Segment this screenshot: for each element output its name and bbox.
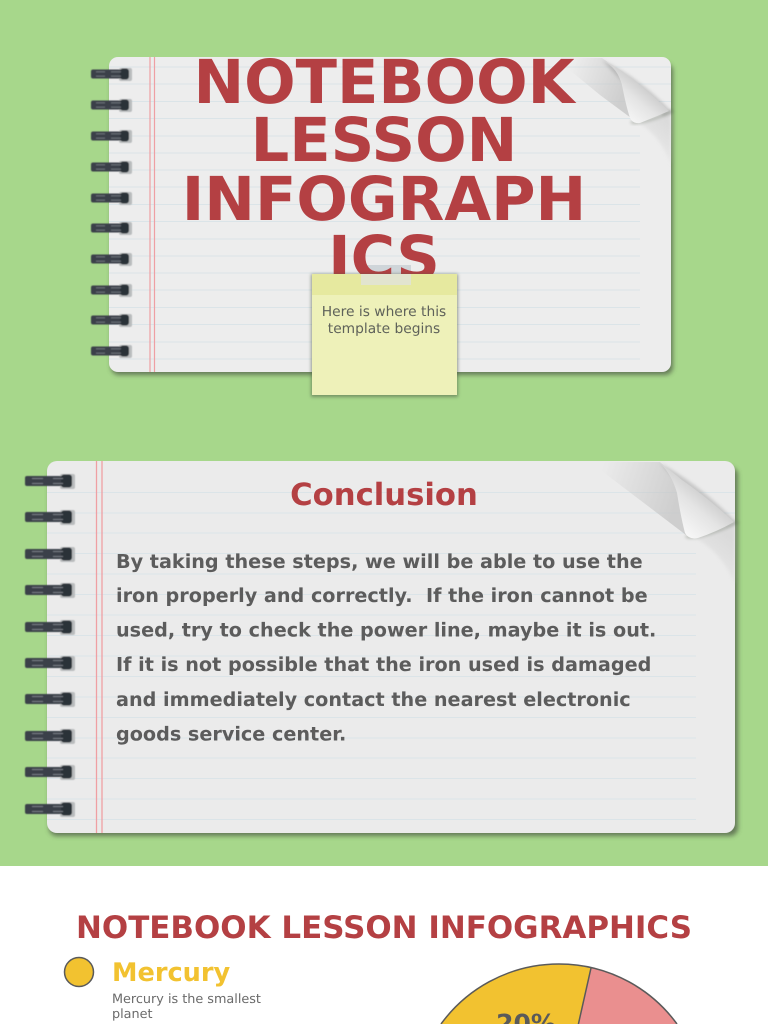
paper sheet — [47, 461, 735, 833]
sticky note — [311, 274, 458, 397]
note body — [312, 274, 457, 395]
pie slice: yellow 20% — [441, 964, 591, 1024]
note text: template begins — [328, 321, 440, 337]
legend: Mercury — [64, 958, 261, 1022]
notebook: conclusion — [25, 461, 738, 836]
pie slice: pink — [578, 968, 677, 1024]
notebook shadow — [49, 467, 738, 836]
main title: ICS — [328, 224, 440, 294]
sticky note tape back — [361, 265, 411, 274]
spiral bindings — [25, 474, 75, 817]
conclusion body text: If it is not possible that the iron used is damaged — [116, 653, 651, 676]
white section background — [0, 866, 768, 1024]
paper sheet — [109, 57, 671, 372]
note shadow — [311, 274, 458, 397]
note text: Here is where this — [322, 304, 446, 320]
ruled lines — [47, 492, 735, 820]
main title: INFOGRAPH — [182, 165, 586, 235]
conclusion heading: Conclusion — [290, 478, 478, 513]
ruled lines — [109, 67, 671, 359]
legend name: Mercury — [112, 958, 230, 988]
margin lines — [96, 461, 102, 833]
conclusion body text: and immediately contact the nearest electronic — [116, 688, 631, 711]
pie outline — [441, 964, 677, 1024]
pie chart — [441, 964, 677, 1024]
main title: NOTEBOOK — [193, 48, 577, 118]
conclusion body text: By taking these steps, we will be able to use the — [116, 550, 643, 573]
main title: LESSON — [251, 106, 517, 176]
conclusion body text: iron properly and correctly. If the iron cannot be — [116, 584, 648, 607]
legend description: planet — [112, 1007, 153, 1022]
note top band — [312, 274, 457, 295]
notebook: title page — [91, 57, 673, 375]
tape front — [361, 274, 411, 285]
page curl — [555, 58, 673, 165]
notebook shadow — [111, 63, 673, 375]
spiral bindings — [91, 68, 132, 358]
section heading: NOTEBOOK LESSON INFOGRAPHICS — [76, 910, 692, 946]
conclusion body text: used, try to check the power line, maybe it is out. — [116, 618, 656, 642]
margin lines — [150, 57, 154, 372]
conclusion body text: goods service center. — [116, 722, 346, 746]
page curl — [590, 462, 738, 585]
legend dot — [64, 958, 94, 986]
legend description: Mercury is the smallest — [112, 992, 261, 1007]
